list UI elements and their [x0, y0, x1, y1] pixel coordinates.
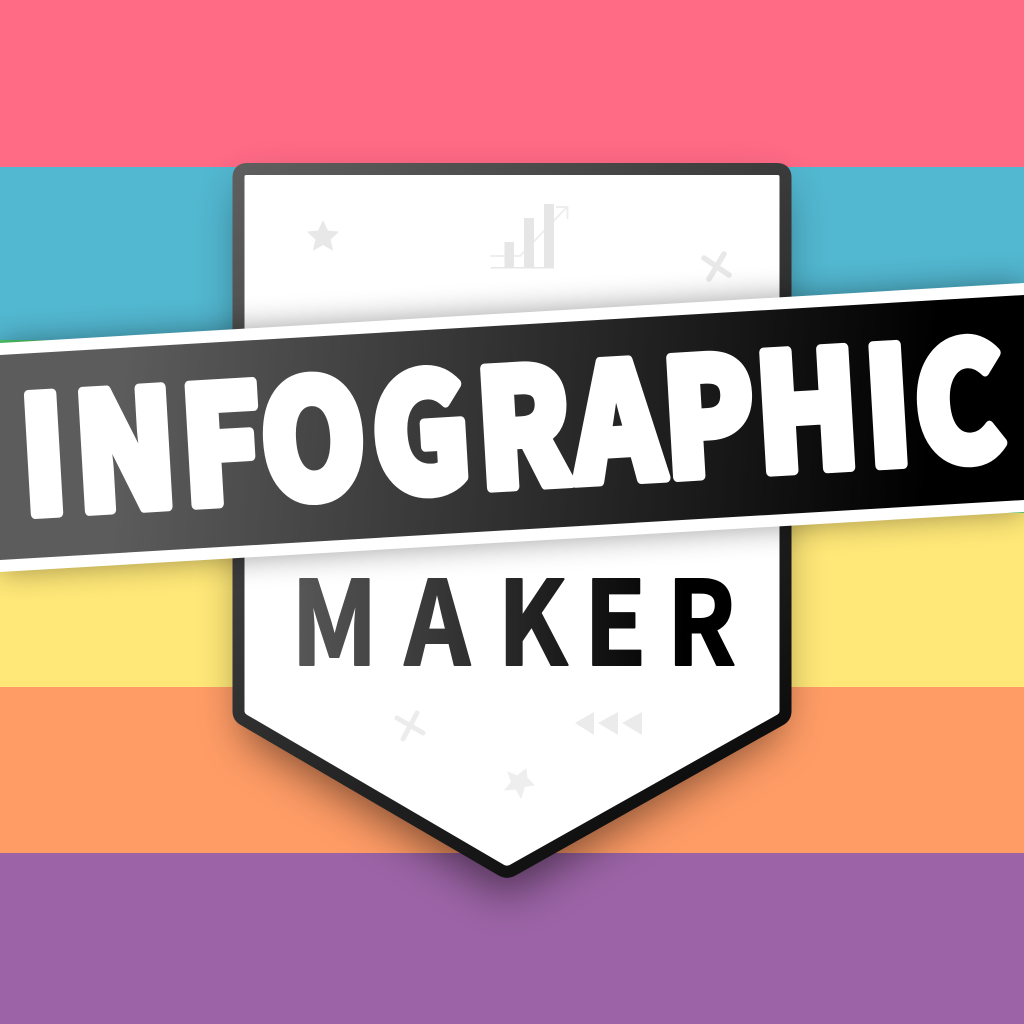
badge panel shadow	[245, 190, 779, 895]
icon: bar chart with rising arrow	[490, 204, 568, 268]
banner shadow	[0, 283, 1024, 572]
icon: star top left	[308, 221, 338, 250]
icon: rewind triangles	[575, 712, 642, 735]
banner title: INFOGRAPHIC: INFOGRAPHIC	[13, 273, 1010, 561]
icon: cross lower left	[397, 713, 423, 739]
banner white edge	[0, 283, 1024, 572]
banner	[0, 273, 1024, 572]
icon: cross top right	[704, 254, 729, 279]
subtitle: MAKER: MAKER	[291, 531, 736, 699]
badge panel	[238, 169, 786, 872]
icon: tilted star bottom	[505, 769, 534, 798]
banner dark fill	[0, 295, 1024, 560]
